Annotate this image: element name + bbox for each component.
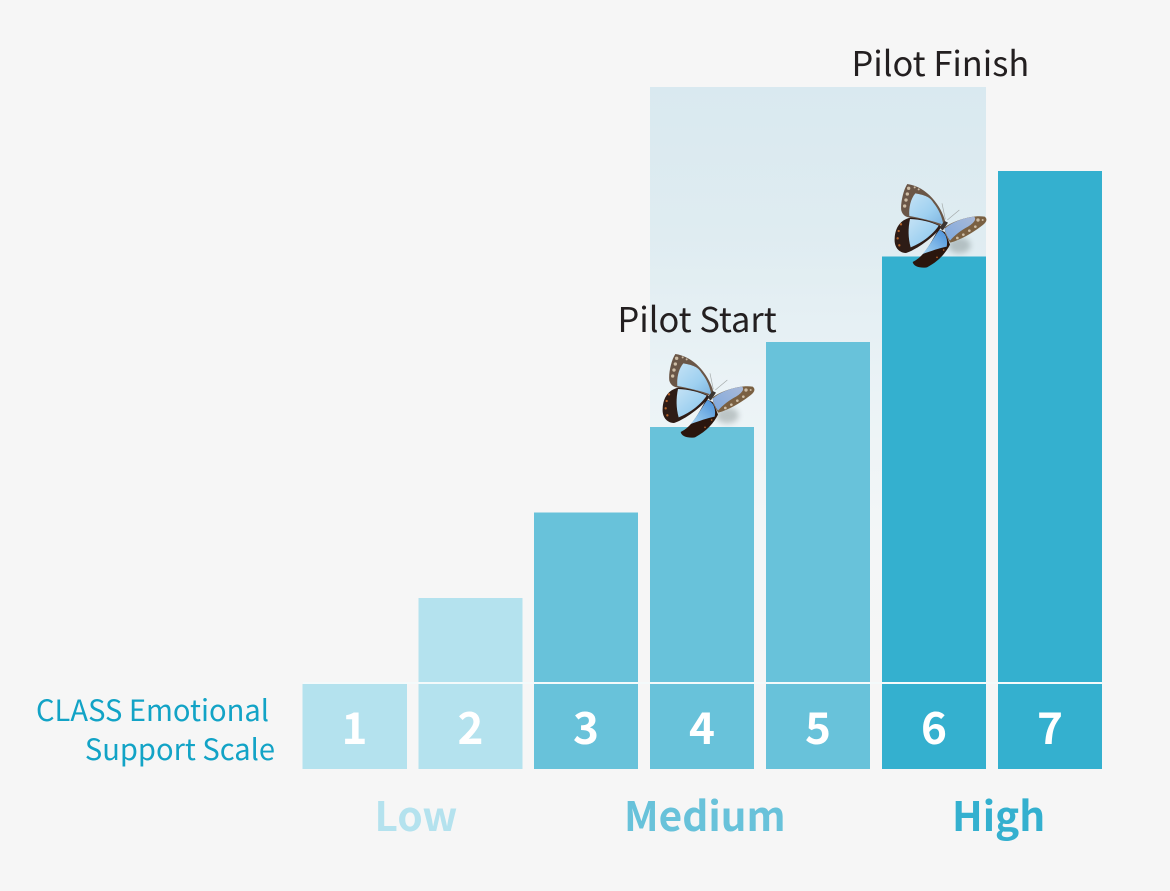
bar 5: 5 bbox=[805, 693, 831, 757]
bar 6 bbox=[882, 256, 986, 769]
category: high: High bbox=[952, 784, 1045, 843]
bar 6: 6 bbox=[921, 693, 947, 757]
axis label: scale name: CLASS Emotional bbox=[36, 688, 269, 730]
bar 2: 2 bbox=[458, 693, 483, 757]
bar 1 bbox=[302, 684, 407, 769]
bar 5 bbox=[766, 342, 870, 769]
bar 1: 1 bbox=[342, 693, 367, 757]
highlighted growth region bbox=[650, 87, 986, 683]
bar 7 bbox=[998, 171, 1102, 769]
bar 4 bbox=[650, 427, 754, 769]
label: pilot finish: Pilot Finish bbox=[852, 36, 1029, 86]
axis label: scale name bbox=[36, 688, 275, 769]
icon: butterfly at pilot finish bbox=[895, 184, 986, 268]
axis label: scale name: Support Scale bbox=[85, 727, 275, 769]
bar 3: 3 bbox=[573, 693, 599, 757]
bar 7: 7 bbox=[1037, 693, 1063, 757]
bar 2 bbox=[418, 598, 522, 769]
bar 3 bbox=[534, 512, 638, 769]
category: low: Low bbox=[374, 784, 457, 843]
bar 4: 4 bbox=[689, 693, 715, 757]
icon: butterfly at pilot start bbox=[663, 354, 754, 438]
category: medium: Medium bbox=[624, 784, 786, 843]
label: pilot start: Pilot Start bbox=[618, 292, 777, 342]
